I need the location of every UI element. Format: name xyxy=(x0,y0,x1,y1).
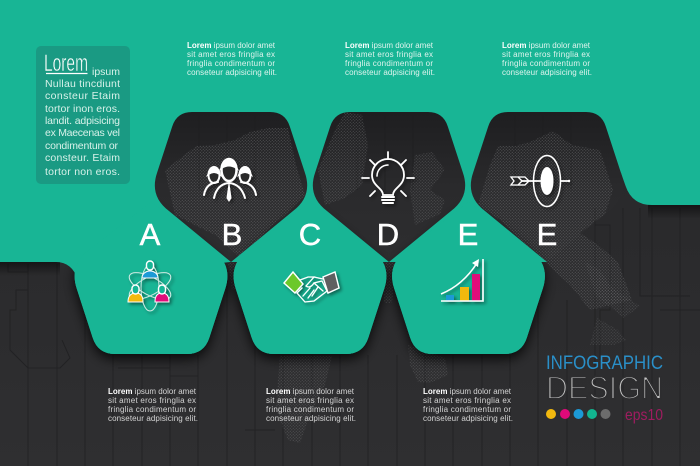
text block bottom 3: fringlia condimentum or xyxy=(423,405,511,414)
text block bottom 2: fringlia condimentum or xyxy=(266,405,354,414)
panel: lorem intro box xyxy=(36,46,130,184)
text block top 3: Lorem ipsum dolor amet xyxy=(502,41,591,50)
text block bottom 2: conseteur adpisicing elit. xyxy=(266,414,356,423)
text block top 1: fringlia condimentum or xyxy=(187,59,275,68)
text block bottom 2: sit amet eros fringlia ex xyxy=(266,396,354,405)
letter B: B xyxy=(222,217,242,252)
text block bottom 3: conseteur adpisicing elit. xyxy=(423,414,513,423)
title: infographic design: DESIGN xyxy=(546,370,663,406)
text block bottom 3 xyxy=(423,387,513,423)
icon: light bulb xyxy=(362,152,414,203)
text block top 2: sit amet eros fringlia ex xyxy=(345,50,433,59)
dark lower field xyxy=(0,172,700,466)
eps10 label: eps10 xyxy=(625,407,663,424)
intro text: consteur. Etaim xyxy=(45,152,120,164)
icon: handshake xyxy=(284,272,339,302)
text block top 1: Lorem ipsum dolor amet xyxy=(187,41,276,50)
text block top 3 xyxy=(502,41,592,77)
dark pentagon tabs xyxy=(155,112,623,262)
letter A: A xyxy=(140,217,161,252)
text block bottom 1: sit amet eros fringlia ex xyxy=(108,396,196,405)
text block bottom 1: fringlia condimentum or xyxy=(108,405,196,414)
shadows under teal edges xyxy=(0,202,700,354)
text block top 1: conseteur adpisicing elit. xyxy=(187,68,277,77)
intro text: landit. adpisicing xyxy=(45,115,120,127)
intro text: ipsum xyxy=(92,66,120,78)
text block bottom 1 xyxy=(108,387,198,423)
intro text: Nullau tincdiunt xyxy=(45,78,120,90)
text block top 2: conseteur adpisicing elit. xyxy=(345,68,435,77)
text block top 2: fringlia condimentum or xyxy=(345,59,433,68)
text block top 3: sit amet eros fringlia ex xyxy=(502,50,590,59)
letter D: D xyxy=(377,217,399,252)
text block bottom 2: Lorem ipsum dolor amet xyxy=(266,387,355,396)
text block top 3: fringlia condimentum or xyxy=(502,59,590,68)
intro text: ex Maecenas vel xyxy=(45,127,120,139)
title: infographic design: INFOGRAPHIC xyxy=(546,352,663,374)
text block bottom 2 xyxy=(266,387,356,423)
colour dots xyxy=(546,409,610,419)
intro text: consteur Etaim xyxy=(45,90,120,102)
text block top 2: Lorem ipsum dolor amet xyxy=(345,41,434,50)
pentagon A xyxy=(75,202,227,354)
text block top 1: sit amet eros fringlia ex xyxy=(187,50,275,59)
pentagon C xyxy=(234,202,386,354)
intro text xyxy=(45,66,120,178)
background vertical lines and circuit traces xyxy=(8,175,700,466)
world map dot pattern xyxy=(165,112,640,443)
teal pentagons xyxy=(75,202,545,354)
intro text: condimentum or xyxy=(45,140,118,152)
letters xyxy=(140,217,557,252)
icon: people xyxy=(204,159,256,201)
text block bottom 3: Lorem ipsum dolor amet xyxy=(423,387,512,396)
pentagon E xyxy=(392,202,545,354)
intro text: tortor inon eros. xyxy=(45,103,120,115)
text block bottom 1: Lorem ipsum dolor amet xyxy=(108,387,197,396)
letter E 1: E xyxy=(458,217,478,252)
heading: Lorem: Lorem xyxy=(44,50,88,77)
text block bottom 1: conseteur adpisicing elit. xyxy=(108,414,198,423)
icon: target with arrow xyxy=(511,156,570,206)
text block top 2 xyxy=(345,41,435,77)
icon: atom with people xyxy=(125,261,175,311)
text block top 3: conseteur adpisicing elit. xyxy=(502,68,592,77)
icon: bar chart xyxy=(441,259,483,301)
intro text: tortor non eros. xyxy=(45,166,120,178)
letter C: C xyxy=(299,217,321,252)
title: infographic design xyxy=(546,352,663,424)
text block bottom 3: sit amet eros fringlia ex xyxy=(423,396,511,405)
letter E 2: E xyxy=(537,217,557,252)
text block top 1 xyxy=(187,41,277,77)
